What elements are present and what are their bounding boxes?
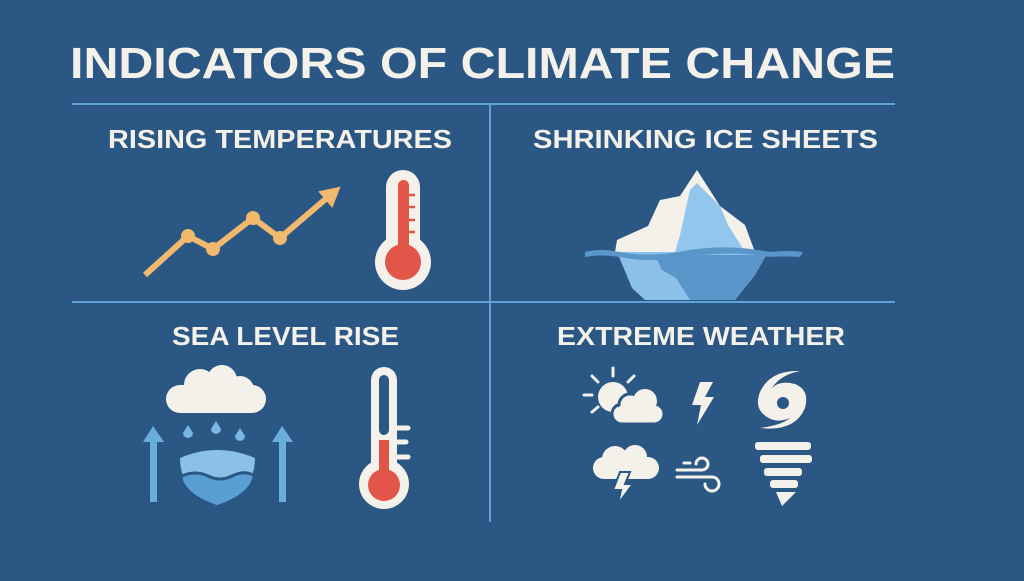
title: INDICATORS OF CLIMATE CHANGE (70, 39, 895, 88)
line chart arrow (145, 188, 339, 275)
icon: storm cloud (593, 445, 659, 504)
icon: water bowl (180, 450, 255, 505)
heading: sea level rise: SEA LEVEL RISE (172, 321, 399, 351)
heading: extreme weather: EXTREME WEATHER (557, 321, 845, 351)
icon: rising arrows (143, 426, 293, 502)
heading: rising temperatures: RISING TEMPERATURES (108, 124, 452, 154)
icon: lightning (692, 382, 714, 425)
icon: thermometer (359, 367, 409, 509)
icon: cloud with rain (166, 365, 266, 441)
icon: wind (677, 458, 719, 491)
heading: shrinking ice sheets: SHRINKING ICE SHEETS (533, 124, 878, 154)
icon: hurricane (758, 371, 806, 429)
icon: iceberg (585, 170, 803, 300)
icon: thermometer high (375, 170, 431, 290)
icon: sun and cloud (584, 368, 664, 424)
icon: tornado (755, 442, 812, 506)
